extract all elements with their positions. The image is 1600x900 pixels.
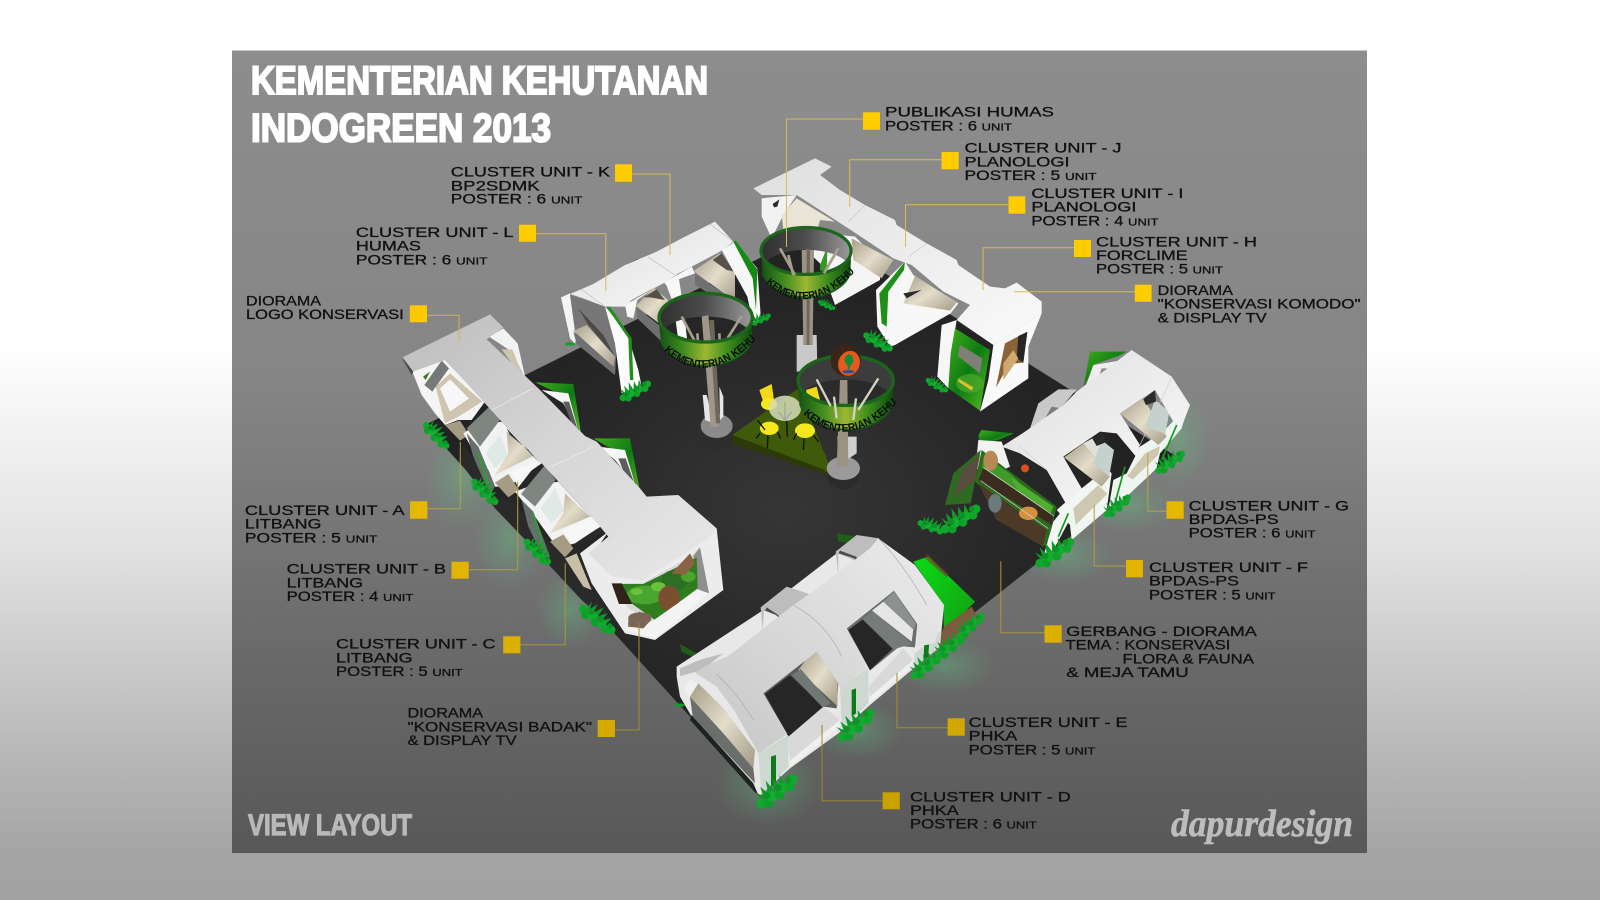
label: POSTER : 4 UNIT	[1031, 213, 1159, 228]
label: CLUSTER UNIT - E	[969, 715, 1128, 730]
label	[885, 104, 1054, 133]
leader line	[615, 623, 639, 730]
view caption: VIEW LAYOUT	[248, 809, 412, 842]
callout: cluster unit H	[983, 234, 1257, 290]
diorama: forest and rhino	[612, 553, 698, 627]
label: CLUSTER UNIT - D	[910, 789, 1071, 804]
label: CLUSTER UNIT - L	[356, 225, 514, 240]
ring column 1	[657, 292, 755, 438]
label: POSTER : 5 UNIT	[964, 168, 1097, 183]
label: POSTER : 5 UNIT	[1096, 262, 1224, 277]
label: CLUSTER UNIT - C	[336, 637, 496, 652]
callout: cluster unit D	[822, 725, 1071, 832]
marker	[615, 164, 632, 182]
label: "KONSERVASI KOMODO"	[1158, 297, 1361, 312]
label: POSTER : 6 UNIT	[356, 252, 488, 267]
leader line	[1001, 561, 1044, 633]
title: INDOGREEN 2013	[251, 106, 551, 150]
panel: layout backdrop	[232, 50, 1367, 853]
label	[287, 562, 446, 604]
exhibition floor	[425, 230, 1174, 787]
booth: cluster F G and flora fauna gate	[916, 350, 1190, 572]
leader line	[822, 725, 883, 801]
label: LITBANG	[287, 575, 363, 590]
callout: cluster unit C	[336, 563, 565, 679]
mural: forest wall	[945, 450, 1057, 547]
green floor glow	[424, 392, 1212, 827]
label: CLUSTER UNIT - A	[245, 503, 404, 518]
title: KEMENTERIAN KEHUTANAN	[251, 59, 708, 103]
label: POSTER : 6 UNIT	[885, 118, 1013, 133]
label	[1096, 234, 1257, 277]
label: & MEJA TAMU	[1066, 665, 1189, 680]
label	[964, 141, 1122, 183]
label: LITBANG	[336, 650, 412, 665]
label	[451, 165, 610, 207]
label: LITBANG	[245, 517, 321, 532]
callout: diorama badak	[408, 623, 639, 748]
label	[1149, 560, 1308, 602]
label: TEMA : KONSERVASI	[1066, 638, 1230, 653]
marker	[883, 792, 900, 809]
label	[1158, 283, 1361, 325]
leader line	[1148, 453, 1166, 511]
marker	[1135, 285, 1152, 302]
callout: publikasi humas	[786, 104, 1054, 247]
label: CLUSTER UNIT - I	[1031, 186, 1183, 201]
label	[408, 706, 592, 748]
lounge carpet, table and chairs	[732, 384, 831, 474]
marker	[1126, 560, 1143, 577]
label: & DISPLAY TV	[408, 733, 517, 748]
label: CLUSTER UNIT - G	[1189, 498, 1349, 513]
callout: diorama logo konservasi	[246, 293, 459, 342]
ring column 3	[796, 344, 896, 480]
label: "KONSERVASI BADAK"	[408, 719, 592, 734]
label	[1189, 498, 1349, 541]
label: & DISPLAY TV	[1158, 310, 1267, 325]
marker	[948, 718, 965, 736]
callout: cluster unit E	[897, 673, 1128, 757]
marker	[1008, 196, 1025, 214]
ring column 2	[699, 226, 888, 427]
leader line	[786, 119, 863, 247]
leader line	[536, 234, 606, 291]
leader line	[850, 160, 942, 207]
callout: cluster unit I	[906, 186, 1183, 247]
label: POSTER : 4 UNIT	[287, 589, 414, 604]
label	[969, 715, 1128, 757]
callout: cluster unit L	[356, 225, 606, 291]
ring column 3: KEMENTERIAN KEHUTANAN	[804, 398, 896, 432]
label: CLUSTER UNIT - B	[287, 562, 446, 577]
leader line	[1094, 505, 1126, 566]
label	[336, 637, 496, 679]
ring column 1: KEMENTERIAN KEHUTANAN	[664, 334, 755, 368]
label: POSTER : 6 UNIT	[910, 817, 1038, 832]
callout: cluster unit A	[245, 442, 460, 545]
label: DIORAMA	[1158, 283, 1233, 298]
label: POSTER : 5 UNIT	[969, 742, 1096, 757]
callout: gerbang diorama	[1001, 561, 1257, 680]
booth: cluster K and L	[561, 222, 772, 405]
label: POSTER : 6 UNIT	[1189, 526, 1316, 541]
plants: cluster K L	[565, 309, 772, 405]
marker	[598, 720, 615, 737]
marker	[519, 225, 536, 242]
callout: diorama komodo	[1014, 283, 1361, 325]
label	[246, 293, 404, 322]
label	[1031, 186, 1183, 228]
label: POSTER : 6 UNIT	[451, 192, 583, 207]
label: POSTER : 5 UNIT	[245, 530, 378, 545]
marker	[410, 501, 427, 519]
label	[910, 789, 1071, 832]
plants: cluster D E gate	[674, 606, 988, 814]
label	[356, 225, 514, 267]
label: PUBLIKASI HUMAS	[885, 104, 1054, 119]
logo: conservation emblem	[826, 340, 865, 380]
label: PHKA	[969, 729, 1017, 744]
leader line	[520, 563, 565, 645]
callout: cluster unit F	[1094, 505, 1308, 602]
title	[251, 59, 708, 150]
marker	[1074, 240, 1091, 257]
label: GERBANG - DIORAMA	[1066, 624, 1257, 639]
leader line	[983, 248, 1074, 290]
leader line	[469, 482, 518, 570]
label: PHKA	[910, 803, 959, 818]
label: LOGO KONSERVASI	[246, 307, 404, 322]
ring column 2: KEMENTERIAN KEHUTANAN	[766, 267, 854, 300]
leader line	[427, 315, 459, 342]
plants: cluster A B C	[419, 415, 623, 639]
label	[1066, 624, 1257, 680]
label: CLUSTER UNIT - H	[1096, 234, 1257, 249]
marker	[863, 112, 880, 130]
label	[245, 503, 404, 545]
marker	[503, 636, 520, 653]
label: POSTER : 5 UNIT	[336, 664, 463, 679]
designer signature: dapurdesign	[1171, 803, 1353, 845]
leader line	[1014, 291, 1135, 293]
marker	[410, 305, 427, 322]
label: DIORAMA	[408, 706, 483, 721]
marker	[452, 562, 469, 579]
label: CLUSTER UNIT - F	[1149, 560, 1308, 575]
callout: cluster unit J	[850, 141, 1122, 207]
label: DIORAMA	[246, 293, 321, 308]
label: HUMAS	[356, 239, 421, 254]
label: BPDAS-PS	[1189, 512, 1279, 527]
label: PLANOLOGI	[964, 154, 1070, 169]
leader line	[897, 673, 948, 728]
leader line	[427, 442, 460, 509]
centre: tree columns, rings and lounge	[596, 226, 896, 530]
leader line	[632, 174, 670, 255]
label: CLUSTER UNIT - J	[964, 141, 1122, 156]
plants: cluster H I J	[817, 296, 952, 395]
label: PLANOLOGI	[1031, 200, 1136, 215]
callout: cluster unit K	[451, 164, 670, 255]
callout: cluster unit G	[1148, 453, 1349, 541]
marker	[942, 152, 959, 169]
callout: cluster unit B	[287, 482, 518, 604]
label: POSTER : 5 UNIT	[1149, 587, 1276, 602]
label: FLORA & FAUNA	[1122, 651, 1254, 666]
label: FORCLIME	[1096, 248, 1188, 263]
booth: cluster D E	[674, 533, 988, 814]
plants: cluster F G gate	[916, 443, 1188, 572]
marker	[1044, 625, 1062, 643]
label: BPDAS-PS	[1149, 574, 1239, 589]
label: CLUSTER UNIT - K	[451, 165, 610, 180]
booth: cluster A B C and badak diorama	[402, 314, 723, 640]
label: BP2SDMK	[451, 178, 540, 193]
booth: cluster H I J and komodo diorama	[753, 158, 1042, 412]
marker	[1166, 501, 1184, 519]
leader line	[906, 205, 1008, 247]
